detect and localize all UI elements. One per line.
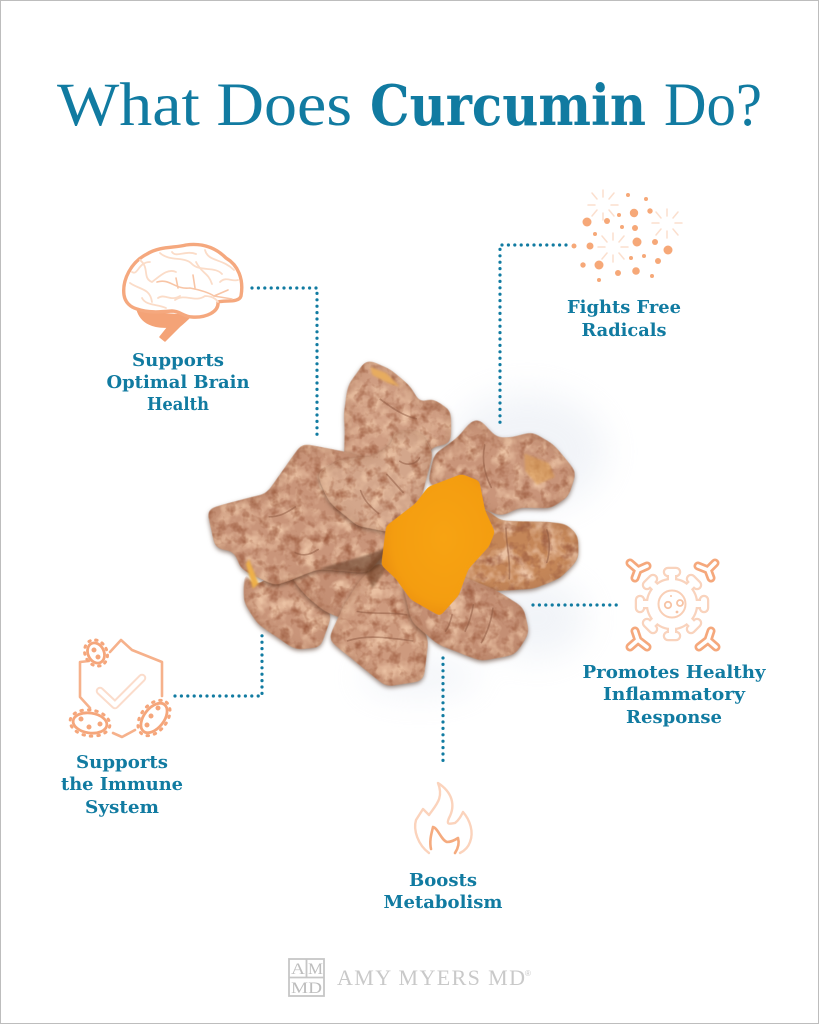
label: inflammatory [582, 662, 766, 728]
icon: flame [415, 783, 472, 853]
label: immune: System [85, 797, 159, 818]
turmeric photo illustration [207, 359, 606, 694]
label: free radicals: Fights Free [567, 297, 681, 318]
label: free radicals: Radicals [582, 320, 666, 341]
logo: M [308, 961, 323, 978]
title [57, 72, 762, 139]
label: immune: the Immune [61, 774, 183, 795]
turmeric surface ridges and highlights [269, 399, 549, 643]
label: inflammatory: Response [626, 707, 722, 728]
logo: ® [525, 969, 531, 978]
connector: metabolism [441, 658, 445, 766]
title: Do? [664, 72, 762, 139]
icon: free radicals [572, 190, 682, 282]
label: brain: Optimal Brain [106, 372, 250, 393]
turmeric slice [381, 474, 495, 616]
label: metabolism [384, 870, 502, 913]
icon: immune shield [68, 636, 177, 742]
label: brain: Health [147, 394, 209, 415]
icon: inflammation virus [630, 563, 716, 647]
connector: inflammatory [533, 603, 620, 607]
label: inflammatory: Inflammatory [603, 684, 746, 705]
label: brain [106, 350, 250, 415]
label: metabolism: Metabolism [384, 892, 502, 913]
connector: immune [175, 632, 262, 696]
label: inflammatory: Promotes Healthy [582, 662, 766, 683]
label: immune [61, 752, 183, 818]
title: What Does [57, 72, 352, 139]
logo: MD [291, 980, 322, 997]
connector: free radicals [500, 245, 566, 423]
logo: A [291, 961, 306, 978]
label: brain: Supports [132, 350, 224, 371]
label: metabolism: Boosts [409, 870, 477, 891]
logo: AMY MYERS MD [337, 965, 525, 990]
title: Curcumin [370, 73, 646, 139]
icon: brain [124, 245, 242, 341]
label: immune: Supports [76, 752, 168, 773]
connector: brain [252, 288, 317, 438]
logo [289, 959, 531, 997]
label: free radicals [567, 297, 681, 341]
